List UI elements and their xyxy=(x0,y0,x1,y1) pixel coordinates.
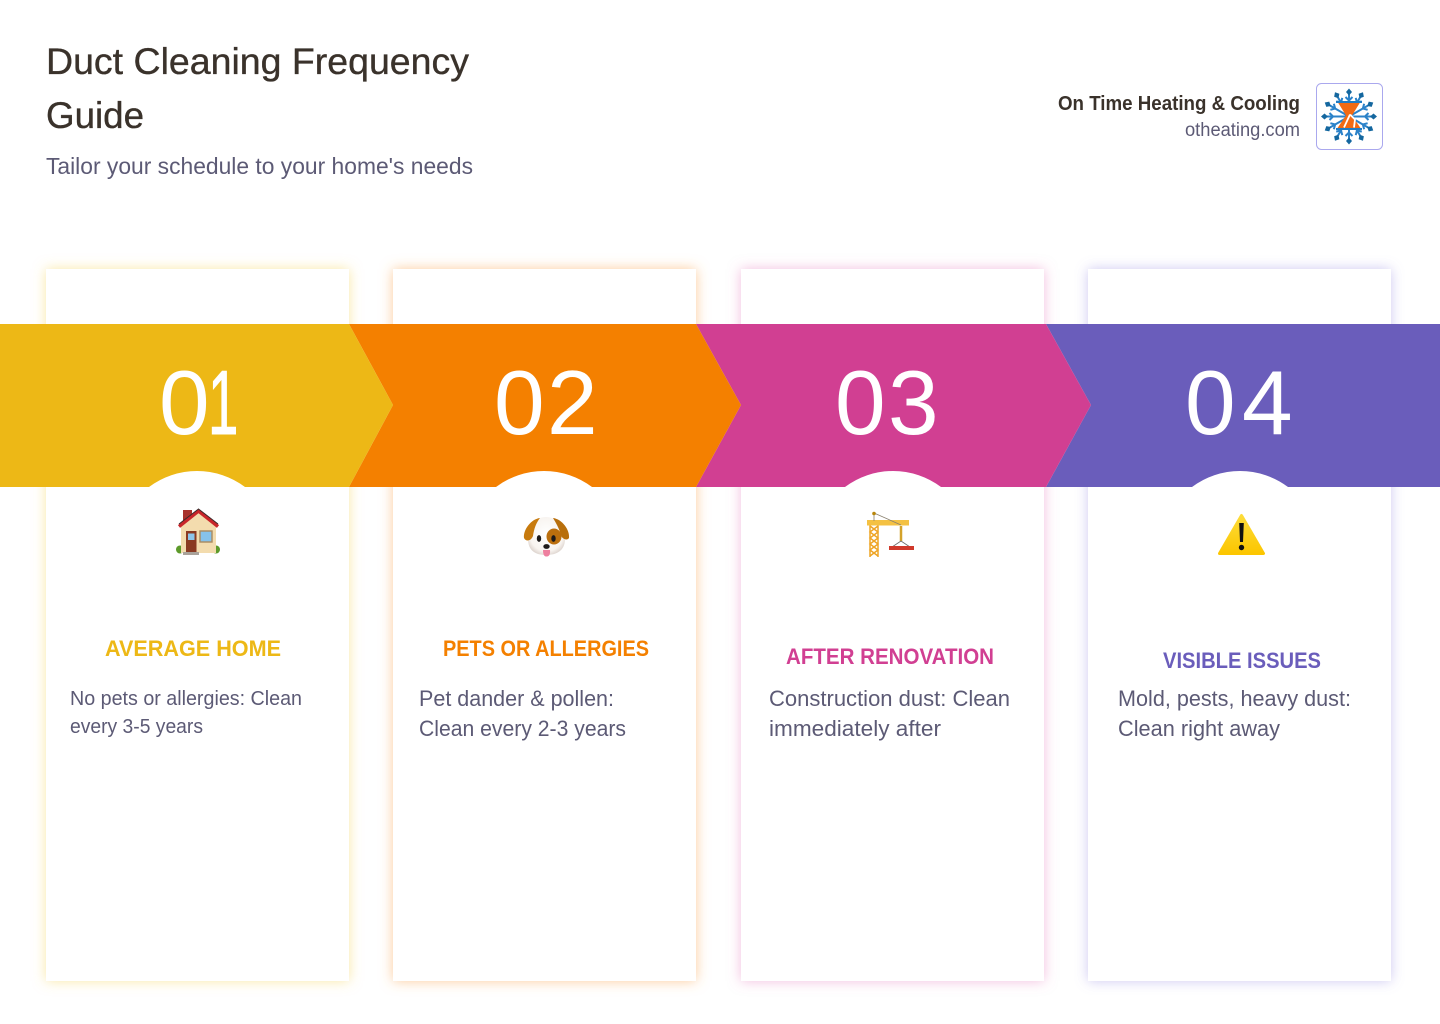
icon: company logo xyxy=(1316,84,1382,150)
text: card 4 description: Mold, pests, heavy dust: xyxy=(1118,686,1351,711)
arrow band: orange step 02 xyxy=(349,324,741,487)
brand name: On Time Heating & Cooling xyxy=(1058,93,1300,115)
text: card 1 description: every 3-5 years xyxy=(70,716,203,738)
white arc notch 3 xyxy=(845,471,941,487)
text: card 1 description: No pets or allergies: Clean xyxy=(70,688,302,710)
number 01 xyxy=(159,352,238,454)
number 04: 04 xyxy=(1185,353,1293,454)
text: card 2 description: Clean every 2-3 years xyxy=(419,716,626,741)
number 01: 1 xyxy=(208,352,238,453)
white arc notch 1 xyxy=(149,471,245,487)
brand url: otheating.com xyxy=(1185,120,1300,141)
heading: after renovation: AFTER RENOVATION xyxy=(786,644,994,669)
icon: house xyxy=(176,509,220,555)
text: card 4 description xyxy=(1118,686,1351,741)
arrow band: purple step 04 xyxy=(1046,324,1440,487)
text: card 2 description: Pet dander & pollen: xyxy=(419,686,614,711)
brand block xyxy=(1058,84,1382,150)
text: card 3 description xyxy=(769,686,1010,741)
white arc notch 2 xyxy=(496,471,592,487)
arrow band: yellow step 01 xyxy=(0,324,393,487)
arrow band: pink step 03 xyxy=(696,324,1091,487)
heading: pets or allergies: PETS OR ALLERGIES xyxy=(443,636,649,661)
text: card 3 description: Construction dust: Clean xyxy=(769,686,1010,711)
number 02: 02 xyxy=(494,353,598,454)
panel: card 3 background xyxy=(741,269,1044,981)
white arc notch 4 xyxy=(1192,471,1288,487)
text: card 4 description: Clean right away xyxy=(1118,716,1280,741)
text: card 2 description xyxy=(419,686,626,741)
icon: warning sign xyxy=(1220,516,1264,554)
panel: card 2 background xyxy=(393,269,696,981)
title: Duct Cleaning Frequency xyxy=(46,41,470,82)
text: card 3 description: immediately after xyxy=(769,716,941,741)
icon: building crane xyxy=(867,512,914,557)
text: card 1 description xyxy=(70,688,302,738)
number 01: 0 xyxy=(159,353,210,454)
panel: card 1 background xyxy=(46,269,349,981)
heading: visible issues: VISIBLE ISSUES xyxy=(1163,648,1321,673)
panel: card 4 background xyxy=(1088,269,1391,981)
title: Guide xyxy=(46,95,144,136)
subtitle: Tailor your schedule to your home's needs xyxy=(46,153,473,179)
heading: average home: AVERAGE HOME xyxy=(105,636,281,661)
title xyxy=(46,41,470,136)
number 03: 03 xyxy=(835,353,939,454)
icon: dog face xyxy=(524,517,569,556)
